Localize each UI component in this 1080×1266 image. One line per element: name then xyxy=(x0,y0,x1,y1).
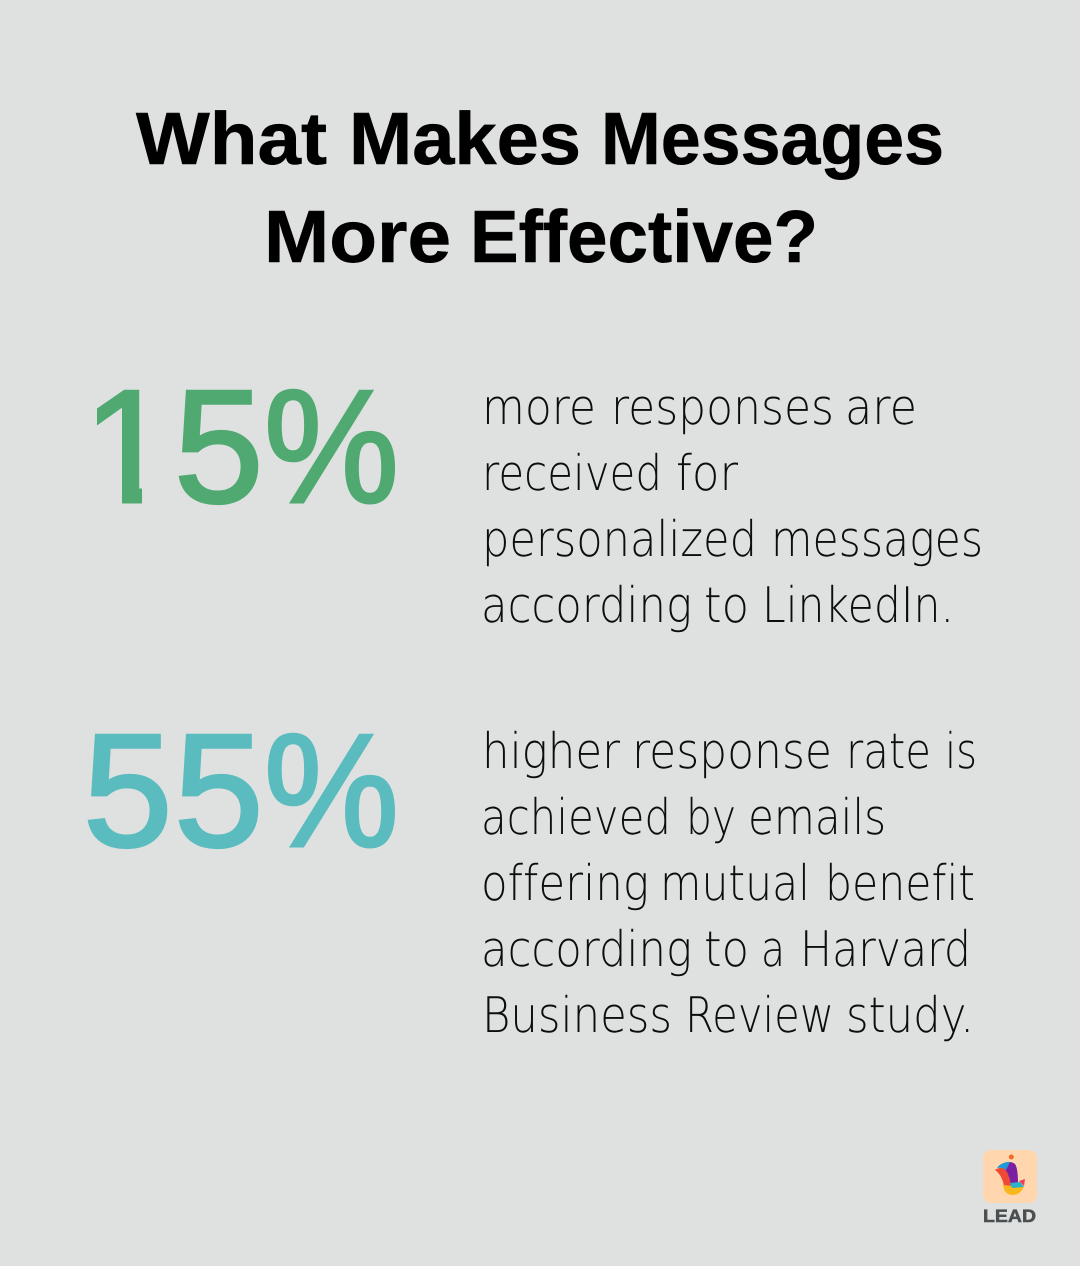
text block: 15% description: personalized xyxy=(482,511,757,568)
text block: 55% description: response xyxy=(632,723,832,780)
text block: 15% description: LinkedIn. xyxy=(762,577,954,634)
text block: 55% description: by xyxy=(686,789,736,846)
text block: 15% description: to xyxy=(704,577,749,634)
stat: 55%: 5 xyxy=(83,701,173,881)
text block: 55% description xyxy=(481,723,977,1044)
stat: 15%: 1 xyxy=(83,357,173,537)
text block: 15% description: messages xyxy=(771,511,983,568)
text block: 55% description: rate xyxy=(846,723,931,780)
text block: 55% description: emails xyxy=(748,789,886,846)
text block: 15% description xyxy=(481,379,983,634)
text block: 55% description: mutual xyxy=(660,855,810,912)
text block: 15% description: received xyxy=(482,445,662,502)
text block: 55% description: is xyxy=(945,723,977,780)
stat: 15%: % xyxy=(264,357,399,537)
logo wordmark: LEAD xyxy=(983,1206,1036,1226)
title: What xyxy=(136,97,327,180)
title xyxy=(136,97,944,278)
title: Effective? xyxy=(470,195,818,278)
title: Makes xyxy=(349,97,581,180)
text block: 55% description: offering xyxy=(481,855,649,912)
text block: 55% description: a xyxy=(761,921,785,978)
text block: 55% description: to xyxy=(704,921,749,978)
logo: LEAD xyxy=(983,1150,1037,1226)
stat: 15% xyxy=(97,388,395,506)
text block: 55% description: Business xyxy=(482,987,672,1044)
stat: 55%: 5 xyxy=(174,701,264,881)
text block: 55% description: study. xyxy=(846,987,974,1044)
text block: 15% description: according xyxy=(481,577,692,634)
text block: 55% description: benefit xyxy=(825,855,975,912)
title: Messages xyxy=(601,97,944,180)
stat: 55% xyxy=(83,701,399,881)
text block: 55% description: achieved xyxy=(481,789,671,846)
text block: 15% description: for xyxy=(676,445,739,502)
icon: logo tile with ribbon bird xyxy=(983,1150,1037,1203)
title: More xyxy=(264,195,451,278)
text block: 55% description: Harvard xyxy=(800,921,971,978)
text block: 55% description: according xyxy=(481,921,692,978)
text block: 15% description: more xyxy=(482,379,596,436)
text block: 15% description: responses xyxy=(611,379,834,436)
text block: 55% description: Review xyxy=(685,987,834,1044)
text block: 55% description: higher xyxy=(482,723,621,780)
stat: 15%: 5 xyxy=(174,357,264,537)
stat: 55%: % xyxy=(264,701,399,881)
text block: 15% description: are xyxy=(845,379,917,436)
